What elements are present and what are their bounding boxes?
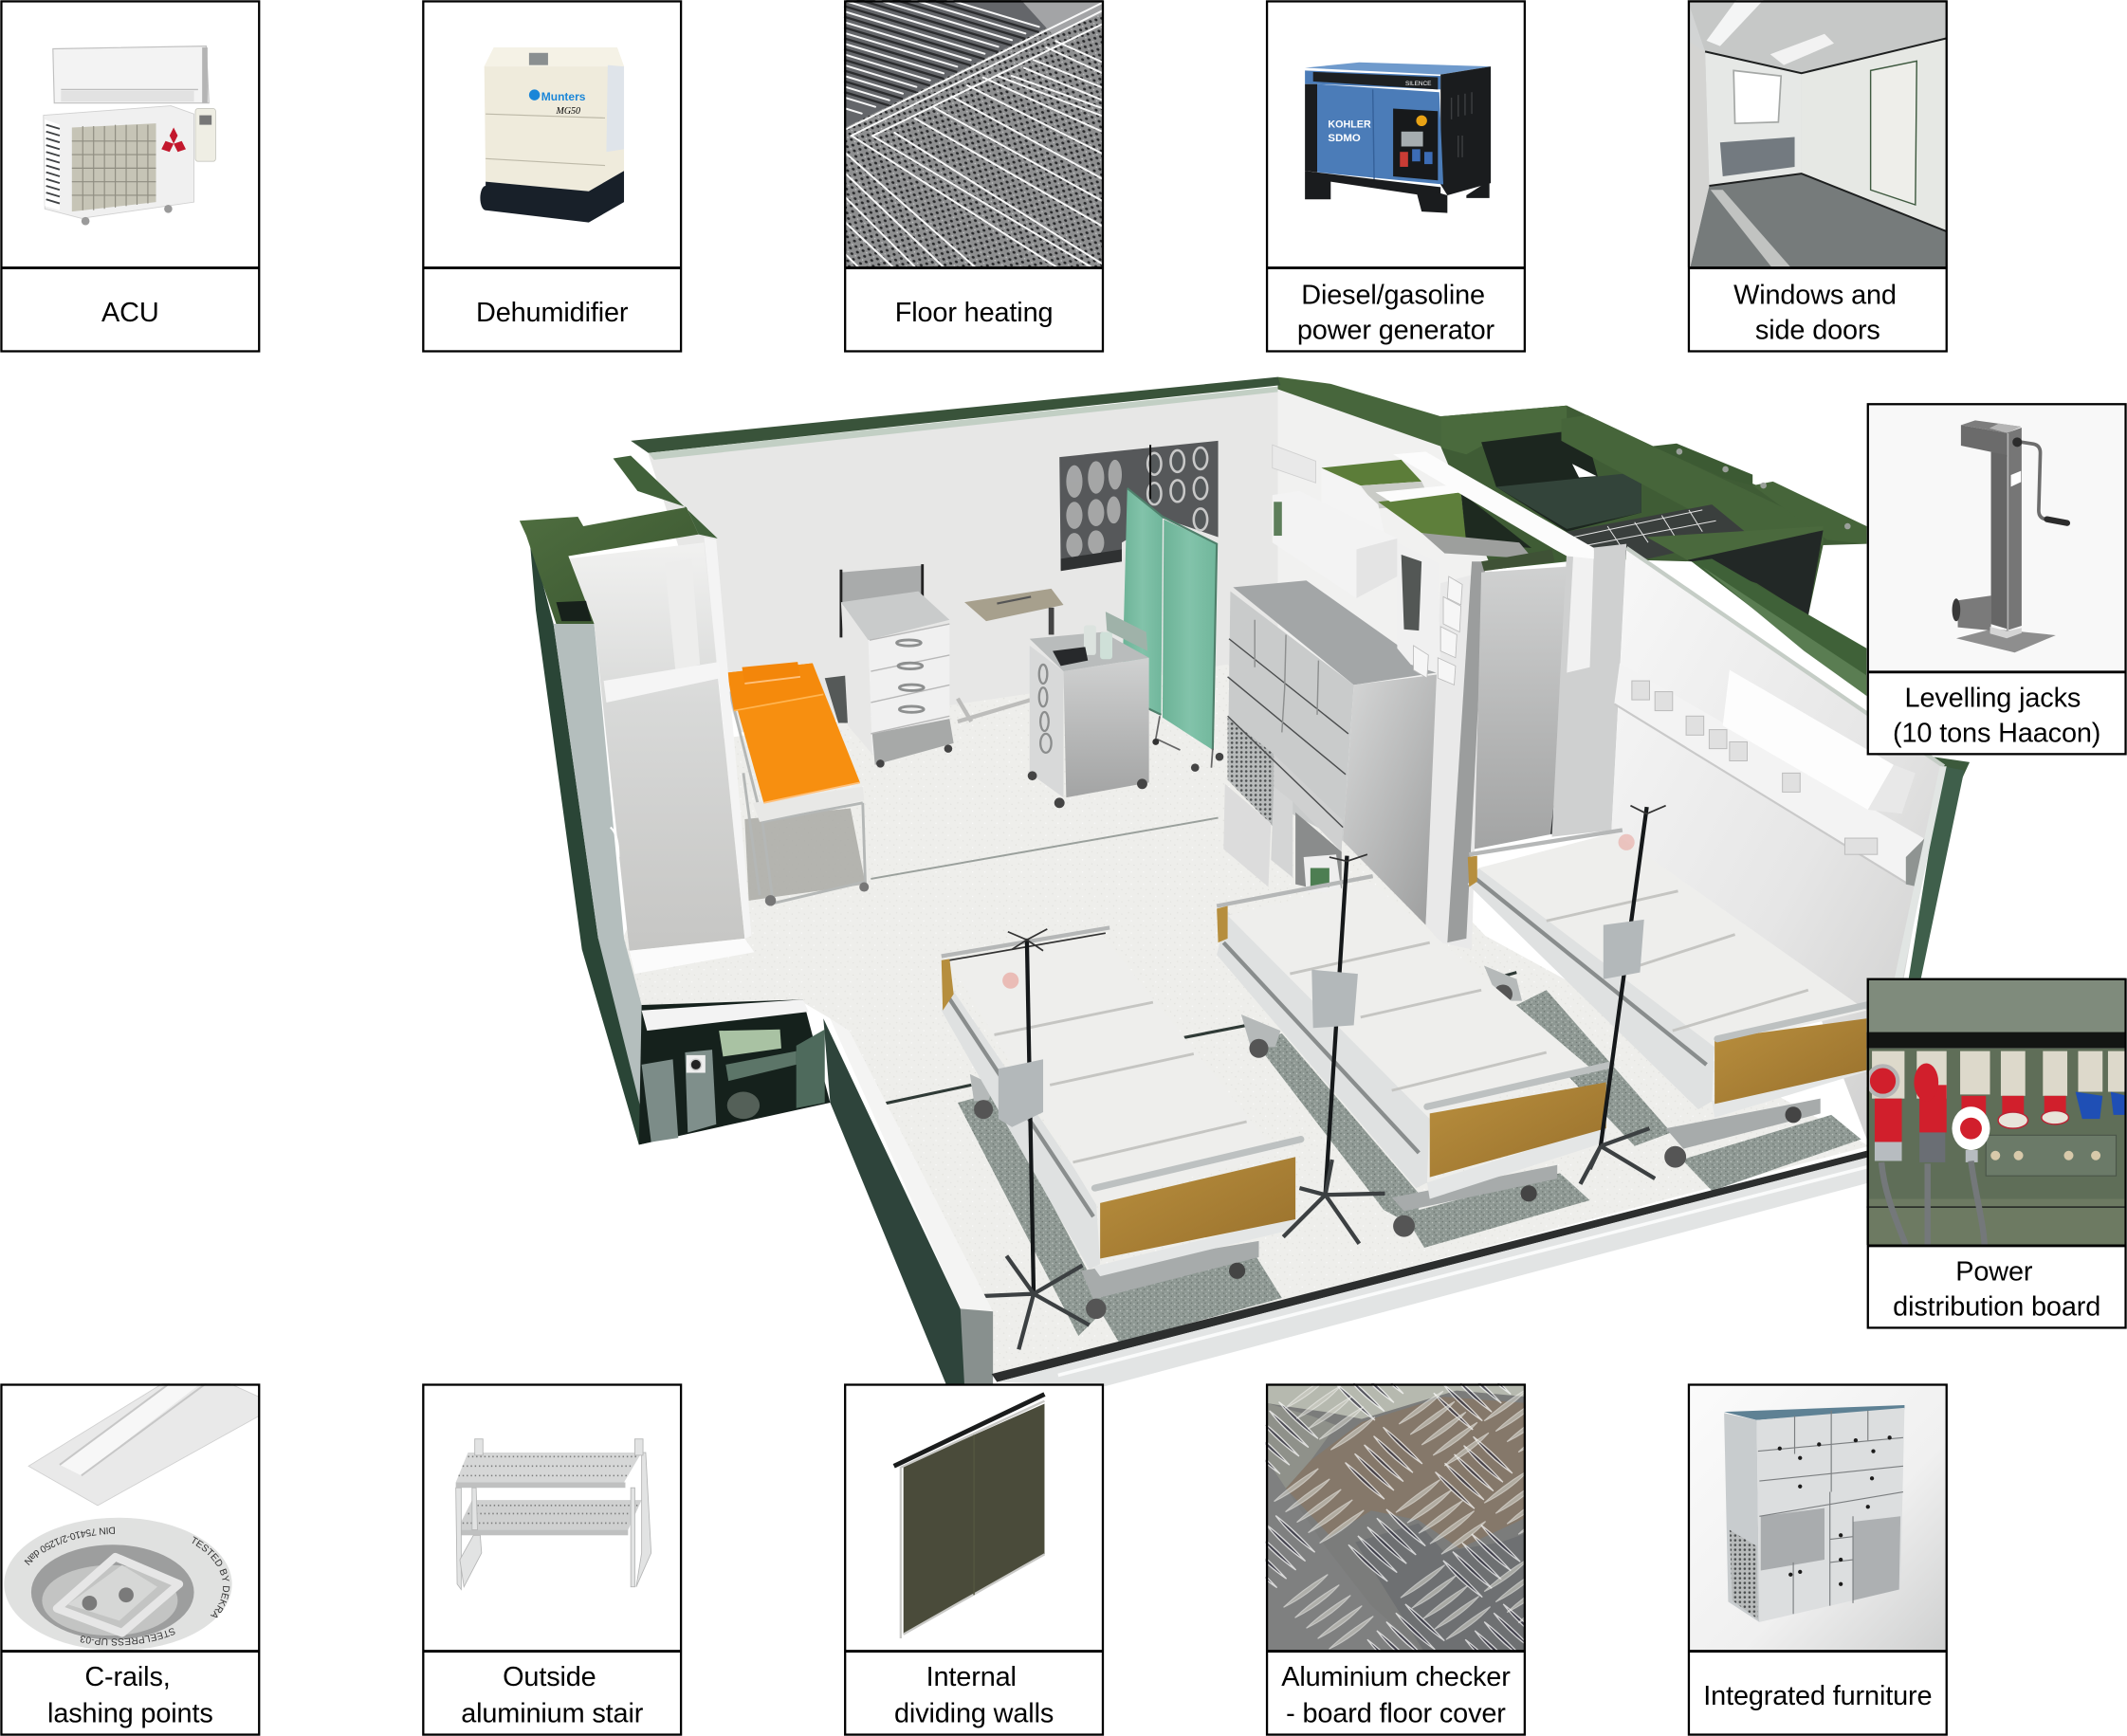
icon: dehumidifier unit: [480, 47, 624, 223]
icon: dividing wall: [894, 1395, 1044, 1638]
caption: lashing points: [47, 1699, 213, 1729]
overbed table: [958, 589, 1064, 722]
caption: ACU: [101, 298, 159, 328]
patient monitor: [1304, 854, 1342, 892]
caption: distribution board: [1893, 1292, 2100, 1323]
caption: [1893, 683, 2100, 748]
caption: (10 tons Haacon): [1893, 718, 2100, 748]
caption: Dehumidifier: [476, 298, 629, 328]
caption: [894, 1662, 1054, 1729]
caption: dividing walls: [894, 1699, 1054, 1729]
card: ACU: [1, 1, 259, 351]
image: checker plate: [1238, 1348, 1574, 1676]
wall profile cross-section notch: [639, 999, 830, 1144]
caption: Aluminium checker: [1281, 1662, 1511, 1692]
card: Dehumidifier: [423, 1, 681, 351]
card: Aluminium checker-board floor cover: [1265, 1383, 1526, 1736]
icon: levelling jack: [1953, 420, 2067, 652]
roof openings and white beams: [1273, 445, 1594, 685]
icon: generator: KOHLER: [1328, 119, 1371, 130]
card: Windows and side doors: [1688, 0, 1948, 351]
floor rails: [871, 818, 1516, 1106]
x-ray wall panel: [1059, 441, 1219, 571]
bed 1 front: [942, 927, 1301, 1319]
bed 3 rear: [1468, 830, 1866, 1168]
left door module: [520, 456, 754, 1144]
caption: side doors: [1755, 316, 1880, 346]
card: Floor heating: [844, 0, 1107, 351]
image: power sockets: [1866, 978, 2127, 1245]
caption: Diesel/gasoline: [1301, 280, 1485, 310]
image: shelter interior: [1688, 0, 1948, 267]
floor shadows under beds: [744, 809, 1861, 1343]
caption: Outside: [503, 1662, 596, 1692]
card: Integrated furniture: [1689, 1385, 1947, 1735]
caption: [1281, 1662, 1511, 1729]
icon: air conditioner: [44, 46, 215, 225]
image: floor heating pipes: [844, 0, 1107, 268]
bed 2 middle: [1217, 876, 1611, 1237]
image: rail and lashing ring: [4, 1383, 258, 1650]
right wall with service rail: [1611, 548, 1964, 1153]
drawer trolley: [841, 564, 954, 768]
caption: Windows and: [1733, 280, 1897, 310]
caption: [1733, 280, 1897, 346]
side wall behind cabinets: [1278, 390, 1493, 813]
back wall: [649, 390, 1278, 732]
front side wall: [823, 1018, 993, 1386]
IV stand 3: [1581, 806, 1666, 1184]
steel trolley: [1028, 612, 1149, 808]
stretcher bin: [825, 674, 866, 722]
card: Levelling jacks: [1868, 404, 2126, 754]
image: rail and lashing ring: STEELPRESS UP-03: [80, 1628, 175, 1646]
caption: Levelling jacks: [1905, 683, 2081, 713]
caption: Floor heating: [895, 298, 1053, 328]
integrated cabinets: [1223, 580, 1440, 925]
structure: green roof frame at rear right: [1278, 377, 1970, 780]
icon: aluminium stair: [456, 1439, 651, 1590]
floor: [617, 665, 1869, 1377]
stretcher: [727, 662, 869, 906]
card: Power distribution board: [1866, 978, 2127, 1327]
caption: [47, 1662, 213, 1729]
caption: aluminium stair: [461, 1699, 644, 1729]
icon: dehumidifier unit: MG50: [556, 106, 580, 117]
air-conditioning unit: [1273, 491, 1397, 598]
caption: [461, 1662, 644, 1729]
caption: C-rails,: [84, 1662, 171, 1692]
icon: generator: [1305, 63, 1491, 213]
caption: [1893, 1256, 2100, 1323]
caption: Power: [1955, 1256, 2033, 1287]
back wall green rim: [631, 377, 1280, 453]
icon: generator: SILENCE: [1405, 81, 1431, 87]
caption: - board floor cover: [1286, 1699, 1506, 1729]
card: C-rails, lashing points: [0, 1383, 260, 1736]
folding screen: [1122, 488, 1223, 772]
caption: Internal: [926, 1662, 1017, 1692]
icon: generator: SDMO: [1328, 133, 1361, 144]
card: Outside aluminium stair: [423, 1385, 681, 1735]
IV stand 1: [971, 929, 1090, 1349]
caption: Integrated furniture: [1703, 1681, 1932, 1711]
card: Internal dividing walls: [845, 1385, 1103, 1735]
caption: [1297, 280, 1495, 346]
IV stand 2: [1283, 854, 1385, 1244]
illustration: cutaway field hospital shelter: [520, 377, 1970, 1386]
card: Diesel generator: [1267, 1, 1525, 351]
image: rail and lashing ring: DIN 75410-2/1250 daN: [25, 1526, 115, 1565]
image: furniture unit: [1689, 1385, 1947, 1651]
image: rail and lashing ring: TESTED BY DEKRA: [192, 1536, 229, 1617]
wall column and services: [1425, 544, 1626, 949]
icon: dehumidifier unit: Munters: [541, 90, 586, 103]
front floor edge strip: [992, 1150, 1869, 1386]
caption: power generator: [1297, 316, 1495, 346]
